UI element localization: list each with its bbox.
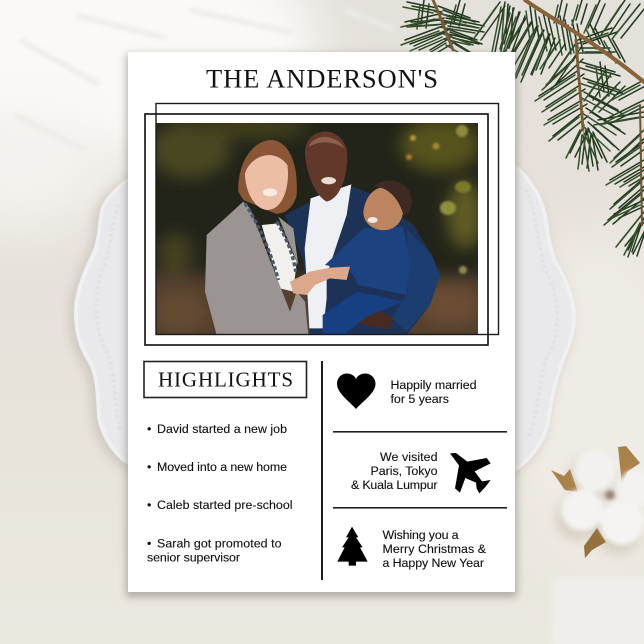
child: head [363,187,404,230]
card shadow [126,54,517,597]
text: travel: Paris, Tokyo [370,464,438,478]
text: travel: & Kuala Lumpur [351,478,438,492]
highlights heading box: HIGHLIGHTS [158,368,293,392]
highlights list: David started a new job [157,422,287,436]
text: married [390,378,477,406]
highlights list: Caleb started pre-school [157,498,292,512]
highlights list: Moved into a new home [157,460,287,474]
man: shirt [305,184,351,328]
cotton flower [551,446,644,558]
highlights list: • [147,422,151,436]
child: jacket [325,227,410,295]
man: jacket [285,187,440,335]
woman: cardigan [205,202,308,335]
woman and child: hands [290,267,350,295]
background: white scalloped plate [70,165,576,475]
text: wishes: a Happy New Year [382,556,484,570]
highlights list: Sarah got promoted to [157,536,282,550]
highlights list: senior supervisor [147,550,240,564]
title: THE ANDERSON'S [206,64,438,94]
card: white panel [128,52,515,592]
man: hand [358,312,394,330]
text: married: for 5 years [390,392,449,406]
text: married: Happily married [390,378,477,392]
icon: airplane [450,453,491,493]
text: travel: We visited [380,450,438,464]
highlights heading box [144,362,306,398]
highlights list [147,422,292,564]
woman: necklace [245,203,296,280]
pine branches [401,0,644,257]
double frame around photo [145,104,498,345]
child: jeans [323,292,403,335]
highlights list: • [147,536,151,550]
icon: heart [337,374,376,409]
background: white fur [0,0,395,230]
highlights list: • [147,498,151,512]
highlights list: • [147,460,151,474]
woman: face [245,155,288,210]
man: head [305,132,347,202]
text: travel [351,450,438,492]
text: wishes [382,528,487,570]
woman: white top [262,223,297,292]
text: wishes: Merry Christmas & [382,542,487,556]
dividers [321,361,507,580]
text: wishes: Wishing you a [382,528,459,542]
family photo [156,123,478,334]
woman: hair [238,140,297,214]
icon: christmas tree [337,527,368,566]
